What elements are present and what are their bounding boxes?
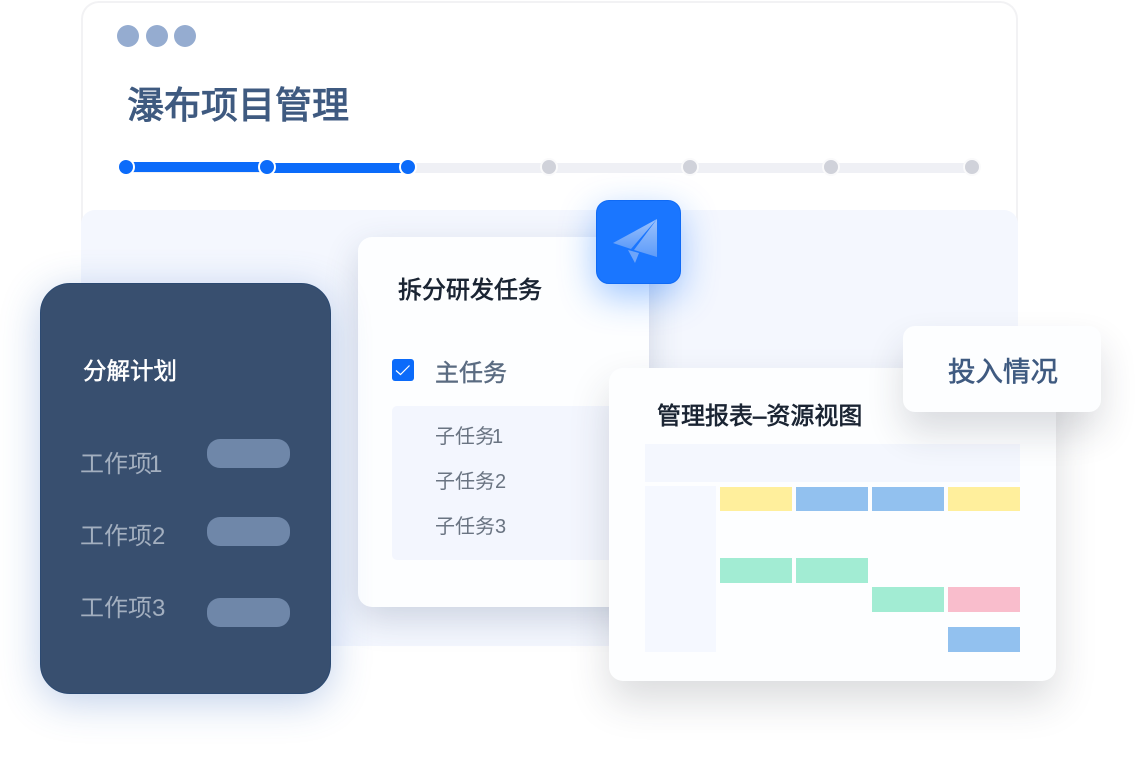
work item 3: 工作项3: [80, 595, 165, 622]
panel: split development tasks: [358, 237, 649, 607]
subtask list: 子任务2: [435, 471, 506, 493]
chart: resource view table: [645, 444, 1020, 652]
timeline: waterfall progress: [119, 160, 979, 174]
heading: split tasks: 拆分研发任务: [398, 277, 542, 304]
panel: decompose plan: [40, 283, 331, 694]
callout: investment status: 投入情况: [948, 356, 1058, 387]
subtask list: [392, 406, 649, 560]
pill 3: [207, 598, 290, 627]
work item 1: 工作项1: [80, 451, 162, 478]
subtask list: 子任务1: [435, 426, 503, 448]
title: 瀑布项目管理: [127, 85, 349, 126]
panel: light blue workspace area: [81, 210, 1018, 646]
icon: window control dots: [117, 25, 196, 47]
icon: checked checkbox: [392, 359, 414, 381]
subtask list: 子任务3: [435, 516, 506, 538]
work item 2: 工作项2: [80, 523, 165, 550]
heading: decompose plan: 分解计划: [83, 358, 177, 384]
pill 2: [207, 517, 290, 546]
panel: management report: [609, 368, 1056, 681]
pill 1: [207, 439, 290, 468]
heading: report resource view: 管理报表–资源视图: [657, 403, 862, 430]
main task label: 主任务: [435, 360, 507, 387]
panel: browser window frame: [81, 1, 1018, 646]
callout: investment status: [903, 326, 1101, 412]
icon: blue paper plane tile: [596, 200, 681, 284]
